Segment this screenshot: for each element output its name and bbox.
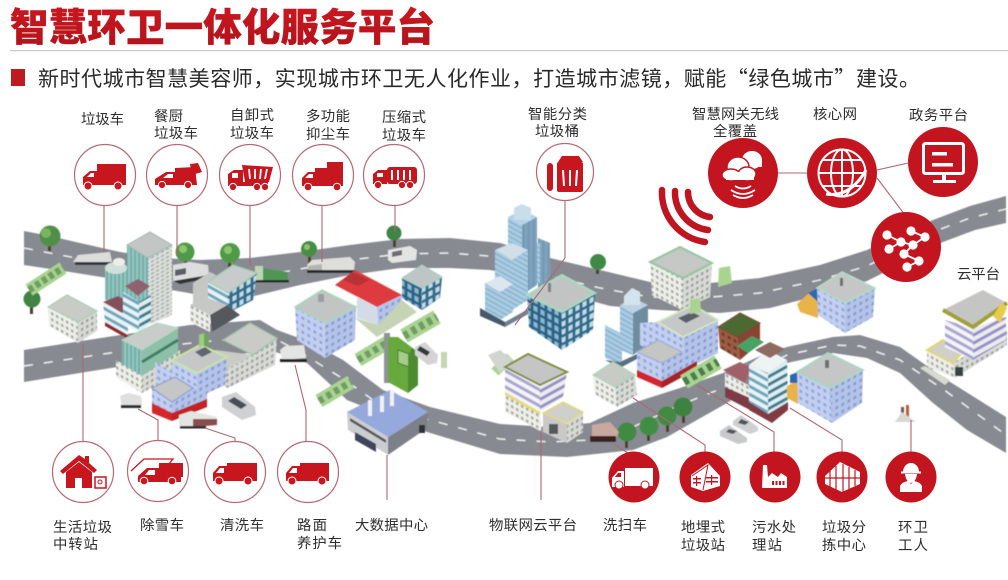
icon: garbage truck bbox=[74, 144, 136, 206]
road: upper bbox=[24, 196, 1006, 313]
building: periwinkle front red base bbox=[637, 340, 697, 388]
labels: top vehicles: 垃圾车 bbox=[230, 125, 274, 142]
building: round teal annex bbox=[105, 258, 127, 300]
building: striped tower right bbox=[749, 342, 788, 423]
building: striped lower annex bbox=[543, 402, 583, 443]
leader lines bbox=[83, 163, 911, 500]
labels: top vehicles: 自卸式 bbox=[230, 107, 274, 124]
labels: top right: 云平台 bbox=[957, 266, 1000, 283]
labels: bottom left: 中转站 bbox=[53, 536, 98, 553]
rooftop tank right bbox=[718, 266, 732, 287]
building: orange annex top bbox=[797, 288, 818, 318]
building: teal tower bbox=[127, 232, 172, 325]
building: periwinkle mid bbox=[155, 345, 227, 398]
vehicle: white cleaner on lower road bbox=[280, 345, 307, 362]
vehicle: white road sweeper bbox=[307, 257, 355, 273]
building: green striped upper bbox=[122, 323, 178, 376]
building: pink-roof wing bbox=[723, 362, 752, 410]
labels: top vehicles bbox=[81, 107, 426, 144]
labels: bottom left: 除雪车 bbox=[140, 517, 184, 534]
building: blue tower two bbox=[605, 288, 650, 368]
icon: snow plough bbox=[128, 440, 188, 502]
labels: top vehicles: 垃圾车 bbox=[382, 127, 426, 144]
building: small red base bbox=[152, 377, 207, 421]
icon: government platform monitor bbox=[908, 127, 978, 197]
labels: bottom left: 清洗车 bbox=[220, 517, 264, 534]
building: small grey front bbox=[593, 362, 637, 407]
title divider bbox=[10, 50, 1008, 51]
icon: sewage plant bbox=[750, 452, 800, 502]
labels: bottom right: 环卫 bbox=[898, 520, 928, 536]
labels: top right bbox=[528, 106, 1000, 283]
icon: sanitation worker bbox=[886, 452, 936, 502]
hedge: left bbox=[29, 268, 63, 290]
green charging sign bbox=[388, 337, 418, 393]
labels: bottom right: 垃圾分 bbox=[822, 519, 866, 536]
lawn: red building bbox=[355, 300, 417, 337]
tree: top left bbox=[40, 226, 60, 251]
building: grey back block bbox=[193, 272, 235, 303]
building: periwinkle lower right bbox=[797, 353, 863, 423]
cars: parked bbox=[720, 415, 758, 444]
labels: top vehicles: 餐厨 bbox=[154, 108, 183, 125]
labels: bottom right: 洗扫车 bbox=[603, 517, 647, 534]
labels: top vehicles: 多功能 bbox=[306, 108, 350, 125]
trees: lower road bbox=[618, 398, 692, 448]
icon: kitchen waste truck bbox=[146, 144, 208, 206]
subtitle: 新时代城市智慧美容师，实现城市环卫无人化作业，打造城市滤镜，赋能“绿色城市”建设。 bbox=[38, 63, 920, 93]
vehicle: parked car bbox=[222, 392, 256, 420]
icon: dust suppression truck bbox=[292, 144, 354, 206]
labels: top right: 政务平台 bbox=[909, 107, 968, 124]
city illustration bbox=[24, 196, 1007, 457]
labels: bottom right bbox=[489, 517, 928, 554]
labels: top right: 全覆盖 bbox=[713, 122, 757, 140]
tree: road right bbox=[386, 226, 402, 247]
vehicle: truck behind tower bbox=[173, 262, 209, 284]
building: small white left bbox=[48, 295, 97, 343]
labels: top right: 核心网 bbox=[813, 106, 857, 123]
building: grey long bbox=[212, 323, 277, 388]
building: orange annex lower bbox=[787, 372, 798, 404]
building: large white base bbox=[116, 350, 180, 393]
hedge: tower front bbox=[684, 362, 718, 382]
building: periwinkle large bbox=[295, 290, 356, 358]
icon: dump truck bbox=[220, 144, 280, 206]
labels: bottom right: 理站 bbox=[752, 537, 782, 554]
subtitle marker bbox=[11, 69, 25, 86]
building: blue skyscraper group bbox=[480, 204, 550, 327]
building: low maroon wing bbox=[103, 296, 135, 339]
icon: household waste station bbox=[52, 442, 114, 502]
vehicle: car at charger bbox=[415, 342, 438, 365]
building: factory bbox=[347, 390, 428, 455]
workers bbox=[895, 405, 916, 422]
road: lower bbox=[24, 320, 1006, 457]
building: striped main bbox=[505, 354, 567, 432]
labels: bottom right: 地埋式 bbox=[681, 519, 725, 536]
labels: bottom right: 污水处 bbox=[752, 519, 796, 536]
icon: cloud platform network bbox=[871, 212, 941, 282]
building: dark blue block bbox=[527, 275, 595, 350]
labels: bottom right: 垃圾站 bbox=[681, 537, 725, 554]
labels: bottom left: 生活垃圾 bbox=[53, 519, 112, 536]
building: periwinkle upper right bbox=[817, 272, 875, 333]
labels: top right: 智能分类 bbox=[528, 106, 587, 123]
vehicle: white van bbox=[388, 246, 417, 263]
icon: signal arcs bbox=[662, 190, 710, 242]
vehicle: white truck front bbox=[179, 411, 217, 428]
hedge block: striped building left bbox=[495, 357, 510, 372]
building: brown bbox=[718, 313, 764, 360]
labels: top vehicles: 垃圾车 bbox=[81, 111, 124, 128]
building: red roof bbox=[335, 270, 402, 325]
icon: road maintenance truck bbox=[278, 442, 338, 502]
tree: middle bbox=[220, 243, 240, 268]
labels: top right: 垃圾桶 bbox=[535, 123, 579, 140]
building: blue corner bbox=[402, 265, 442, 310]
icon: sorting centre bbox=[816, 452, 868, 502]
labels: bottom right: 工人 bbox=[898, 537, 928, 554]
labels: bottom right: 物联网云平台 bbox=[489, 517, 577, 534]
labels: bottom left bbox=[53, 517, 428, 553]
vehicle: tanker on upper road bbox=[73, 252, 112, 265]
rooftop tank bbox=[690, 298, 701, 314]
tree: behind tower bbox=[176, 242, 194, 263]
building: cloud platform bbox=[927, 330, 1007, 378]
hedge: cluster middle bbox=[358, 341, 390, 360]
tree: left lower bbox=[24, 290, 40, 314]
vehicle: green truck bbox=[255, 266, 289, 282]
building: small grey by hedge bbox=[488, 350, 512, 373]
building: white corner bbox=[650, 247, 712, 310]
tree: centre bbox=[590, 254, 606, 274]
icon: underground station bbox=[680, 452, 730, 502]
icon: smart bin bbox=[536, 144, 594, 200]
labels: top vehicles: 压缩式 bbox=[382, 109, 426, 126]
vehicle: small cleaner bbox=[120, 393, 142, 408]
labels: bottom right: 拣中心 bbox=[822, 537, 866, 554]
charger bbox=[441, 352, 447, 368]
rooftop tank bbox=[199, 333, 209, 348]
labels: top vehicles: 抑尘车 bbox=[306, 126, 350, 143]
labels: top vehicles: 垃圾车 bbox=[154, 125, 198, 142]
icon: road sweeper bbox=[608, 452, 660, 502]
icon: gateway cloud bbox=[708, 138, 778, 208]
hedge: cluster lower bbox=[319, 382, 351, 401]
building: grey front block bbox=[190, 297, 240, 332]
road crossing bbox=[920, 366, 950, 385]
labels: bottom left: 路面 bbox=[297, 517, 327, 534]
building: periwinkle cluster upper bbox=[640, 305, 718, 370]
icon: washing truck bbox=[204, 442, 266, 502]
charging pole bbox=[384, 333, 390, 383]
vehicle: maroon truck bbox=[590, 422, 619, 442]
building: blue rooftop block bbox=[208, 265, 257, 313]
title: 智慧环卫一体化服务平台 bbox=[10, 6, 435, 50]
labels: bottom left: 大数据中心 bbox=[355, 517, 428, 534]
labels: top right: 智慧网关无线 bbox=[692, 106, 779, 123]
building: striped tower bbox=[123, 279, 151, 333]
tree: road bbox=[301, 241, 317, 263]
hedge: cluster top right bbox=[404, 317, 437, 336]
labels: bottom left: 养护车 bbox=[297, 535, 342, 552]
icon: core network globe bbox=[807, 138, 877, 208]
icon: compactor truck bbox=[364, 144, 424, 206]
